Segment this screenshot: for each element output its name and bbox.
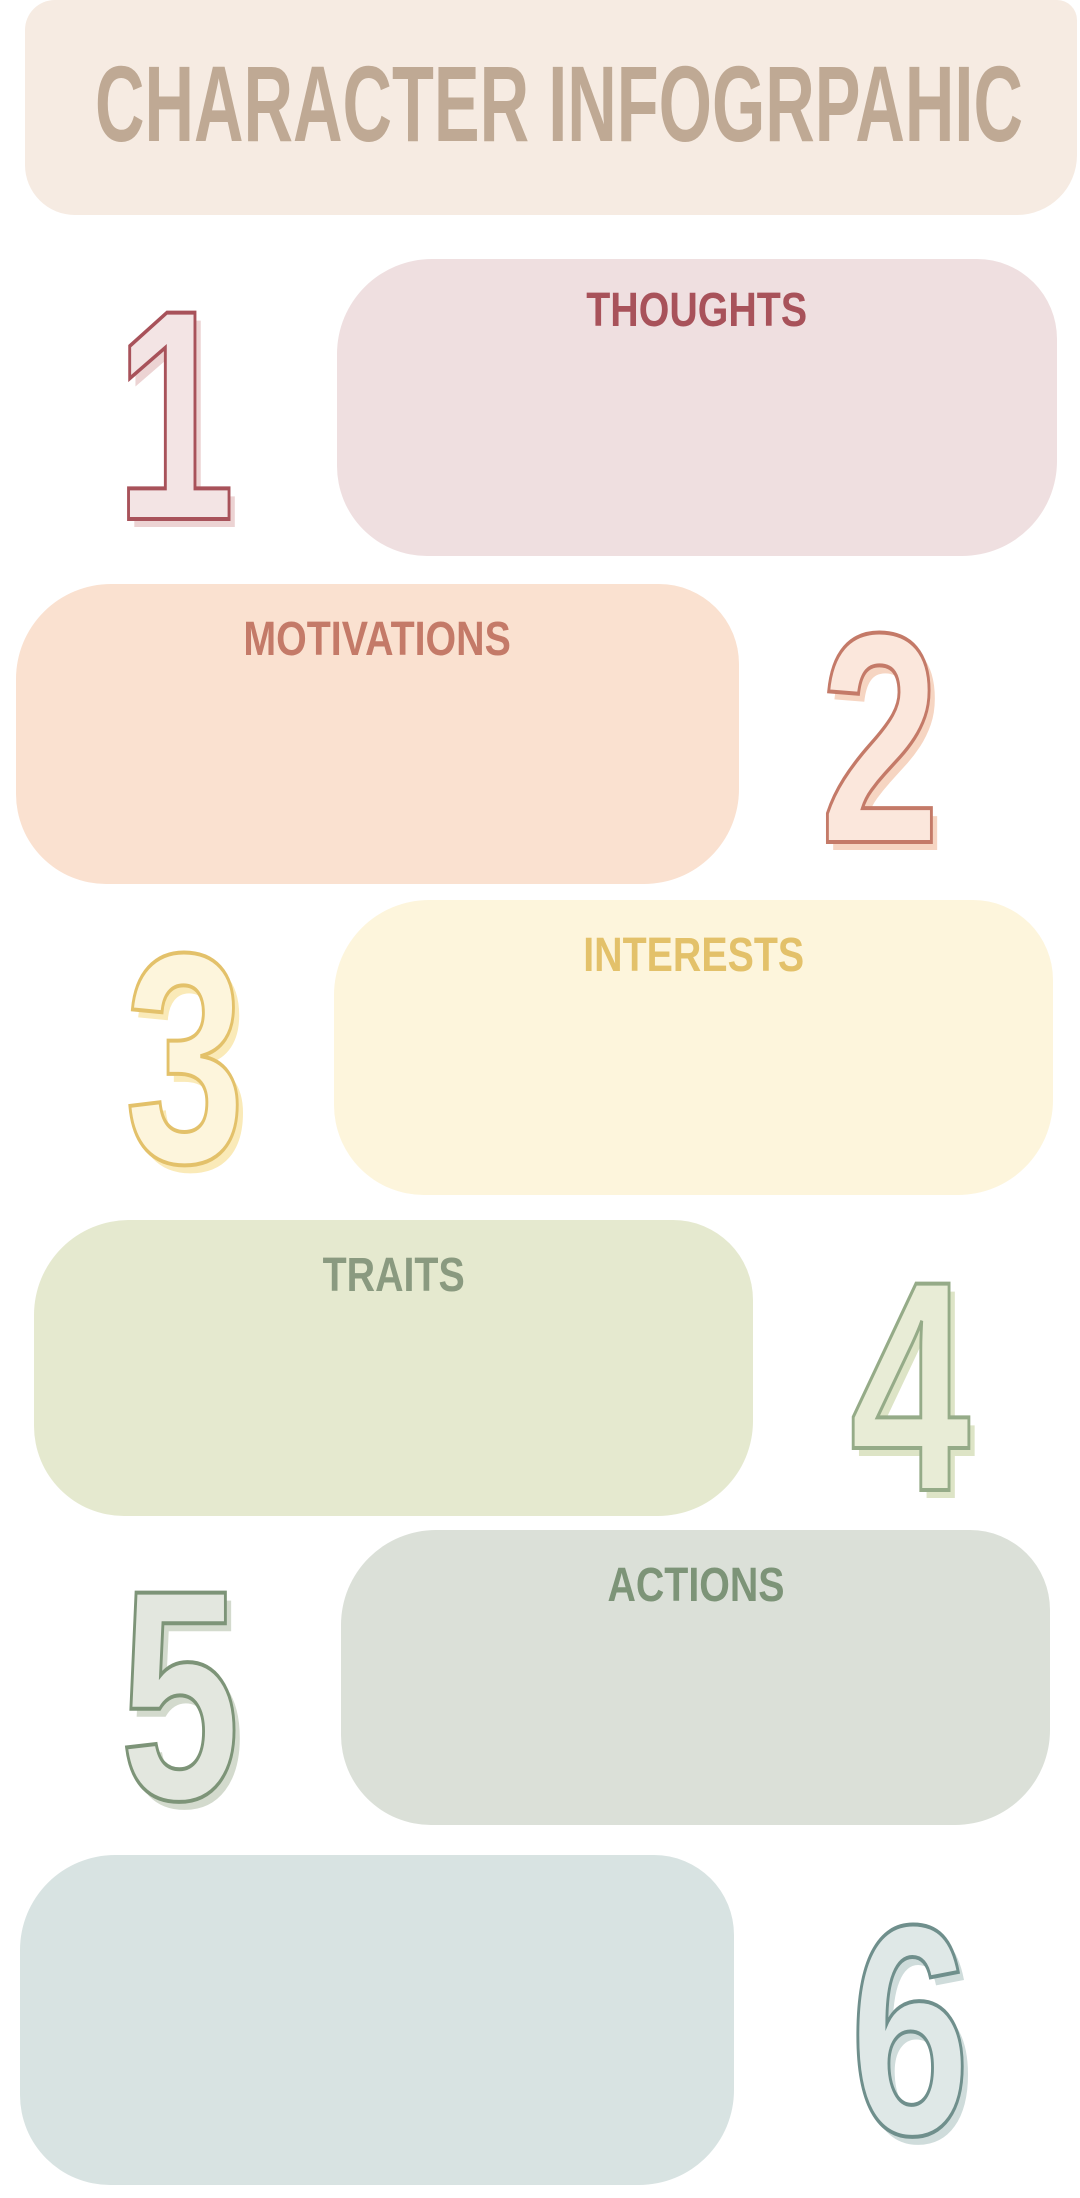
number 3: 3 xyxy=(125,890,245,1226)
panel: thoughts xyxy=(337,259,1057,556)
heading: thoughts: THOUGHTS xyxy=(587,284,807,337)
heading: traits: TRAITS xyxy=(322,1249,465,1302)
title banner xyxy=(25,0,1077,215)
heading: motivations: MOTIVATIONS xyxy=(244,613,511,666)
panel: sixth xyxy=(20,1855,734,2185)
number 2: 2 xyxy=(820,570,940,906)
number 4: 4 xyxy=(850,1218,970,1554)
panel: traits xyxy=(34,1220,753,1516)
number 5: 5 xyxy=(120,1527,240,1863)
panel: interests xyxy=(334,900,1053,1195)
panel: actions xyxy=(341,1530,1050,1825)
number 1: 1 xyxy=(115,247,235,583)
panel: motivations xyxy=(16,584,739,884)
heading: interests: INTERESTS xyxy=(583,929,804,982)
heading: actions: ACTIONS xyxy=(607,1559,784,1612)
number 6: 6 xyxy=(850,1862,970,2198)
